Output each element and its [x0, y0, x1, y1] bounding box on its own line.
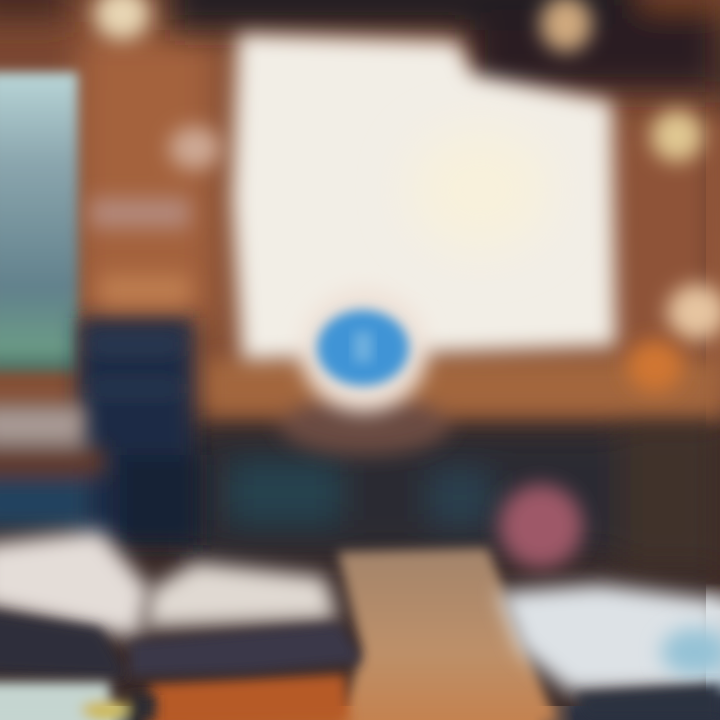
- ceiling and wall lights: [94, 0, 720, 392]
- left stack: shelved books: [0, 405, 105, 528]
- ball: pink globe: [499, 484, 583, 568]
- open book: left foreground: [0, 530, 362, 678]
- icon: blue circle badge with white halo: [300, 288, 428, 412]
- wooden ledge under the board: [205, 360, 720, 455]
- notebook: bottom-left corner: [0, 682, 156, 720]
- board glow: [410, 130, 550, 250]
- background: brick wall: [0, 0, 720, 420]
- table: orange front edge: [148, 674, 350, 720]
- shelf: dark navy cabinet: [78, 318, 200, 545]
- whiteboard: [232, 34, 616, 360]
- ceiling: dark beams: [0, 0, 720, 92]
- lower room: dark band: [190, 420, 720, 570]
- wall signs: pale blocks: [90, 126, 221, 305]
- table: wooden top: [338, 548, 555, 720]
- open book: right foreground: [498, 584, 720, 720]
- window: left side: [0, 72, 78, 372]
